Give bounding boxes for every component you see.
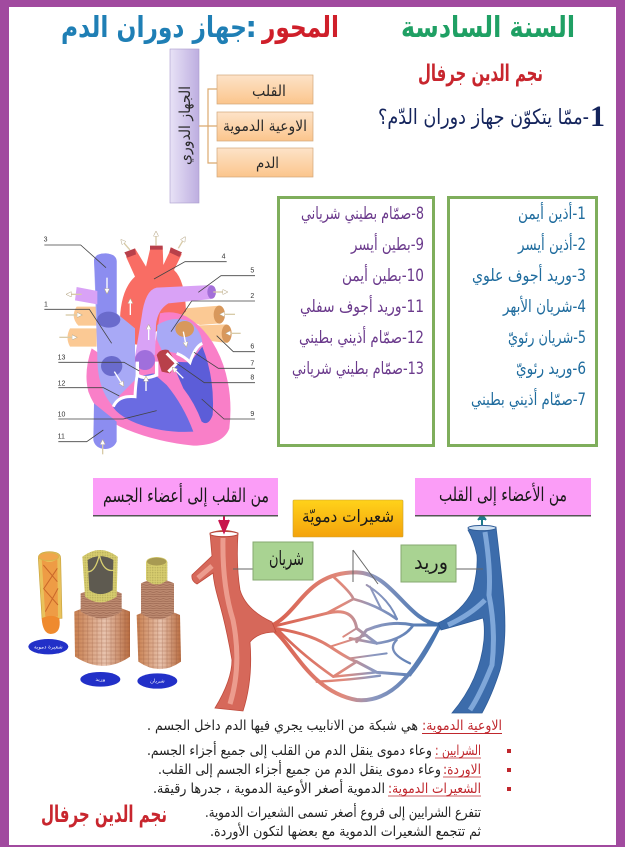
- oval label: capillary: شعيرة دموية: [34, 644, 63, 650]
- box: heart: القلب: [252, 82, 286, 100]
- left atrium: [157, 319, 202, 362]
- label box: artery: [253, 542, 313, 580]
- number labels: 8: [250, 374, 254, 381]
- number labels: 10: [58, 411, 66, 418]
- artery: [192, 530, 276, 711]
- text block: branching note: تتفرع الشرايين إلى فروع أصغر تسمى الشعيرات الدموية.: [205, 803, 481, 821]
- title: topic: :: [245, 10, 257, 44]
- left ventricle: [172, 347, 213, 423]
- label box: capillaries: شعيرات دمويّة: [302, 507, 394, 527]
- text block: vessel types list: الدموية أصغر الأوعية الدموية ، جدرها رقيقة.: [153, 779, 385, 797]
- oval label: capillary: [28, 639, 68, 654]
- box: blood vessels: [217, 112, 313, 141]
- panel: heart part names 1-7: 4-شريان الأبهر: [502, 296, 586, 317]
- artery cross section: [137, 557, 181, 669]
- panel: heart part names 1-7: 7-صمّام أذيني بطيني: [471, 388, 586, 410]
- inferior vena cava: [93, 403, 117, 449]
- arrow: blood out of vein: [478, 515, 486, 525]
- panel: heart part names 1-7: 5-شريان رئويّ: [508, 328, 586, 348]
- panel: heart part names 8-13: [278, 198, 434, 446]
- number labels: 11: [58, 434, 65, 441]
- title: grade level: السنة السادسة: [401, 10, 575, 44]
- bullet list markers: [507, 749, 511, 791]
- number labels: 2: [250, 293, 254, 300]
- text block: vessel types list: وعاء دموى ينقل الدم من جميع أجزاء الجسم إلى القلب.: [158, 760, 441, 778]
- label box: from organs to heart: من الأعضاء إلى القلب: [439, 483, 567, 507]
- oval label: artery: [137, 673, 177, 689]
- text block: vessel types list: الشرايين :: [435, 743, 481, 759]
- root box: الجهاز الدوري: [176, 86, 195, 165]
- text block: blood vessels definition: هي شبكة من الانابيب يجري فيها الدم داخل الجسم .: [147, 718, 418, 734]
- label box: from heart to body: من القلب إلى أعضاء الجسم: [103, 483, 269, 508]
- question 1: -ممّا يتكوّن جهاز دوران الدّم؟: [378, 105, 589, 129]
- number labels: 4: [222, 254, 226, 261]
- box: blood: الدم: [256, 154, 279, 172]
- number labels: 9: [250, 411, 254, 418]
- pulmonary artery: [75, 285, 216, 370]
- leader lines: [44, 245, 255, 442]
- text block: blood vessels definition: الاوعية الدموية:: [422, 718, 502, 734]
- author name top: نجم الدين جرفال: [418, 61, 543, 87]
- myocardium: [86, 312, 230, 446]
- panel: heart part names 1-7: [448, 198, 596, 446]
- label box: from organs to heart: [415, 478, 591, 516]
- panel: heart part names 8-13: 8-صمّام بطيني شرياني: [301, 204, 424, 224]
- label box: vein: وريد: [414, 550, 448, 574]
- label box: capillaries: [293, 500, 403, 537]
- number labels: 13: [58, 355, 66, 362]
- box: blood: [217, 148, 313, 177]
- aorta: [120, 247, 186, 345]
- oval label: vein: وريد: [95, 677, 106, 683]
- panel: heart part names 8-13: 10-بطين أيمن: [342, 264, 424, 286]
- panel: heart part names 1-7: 1-أذين أيمن: [518, 202, 586, 224]
- root box: [170, 49, 199, 203]
- text block: vessel types list: الاوردة:: [443, 762, 481, 778]
- capillary cross section: [38, 552, 62, 634]
- box: blood vessels: الاوعية الدموية: [223, 117, 307, 135]
- oval label: artery: شريان: [150, 679, 165, 685]
- vein: [438, 525, 505, 713]
- oval label: vein: [80, 672, 120, 687]
- question 1: [378, 100, 605, 133]
- illustration: artery capillaries vein network: [192, 515, 505, 713]
- label box: from heart to body: [93, 478, 278, 516]
- panel: heart part names 1-7: 6-وريد رئويّ: [516, 359, 586, 379]
- text block: branching note: ثم تتجمع الشعيرات الدموية مع بعضها لتكون الأوردة.: [210, 822, 481, 840]
- panel: heart part names 8-13: 13-صمّام بطيني شرياني: [292, 359, 424, 379]
- number labels: [44, 237, 254, 441]
- capillary network: [272, 572, 440, 700]
- number labels: 6: [250, 344, 254, 351]
- vein cross section: [74, 550, 130, 666]
- text block: vessel types list: وعاء دموى ينقل الدم من القلب إلى جميع أجزاء الجسم.: [147, 741, 432, 759]
- text block: vessel types list: الشعيرات الدموية:: [388, 781, 481, 797]
- number labels: 1: [44, 302, 48, 309]
- panel: heart part names 8-13: 9-بطين أيسر: [350, 233, 424, 255]
- number labels: 3: [44, 237, 48, 244]
- panel: heart part names 8-13: 12-صمّام أذيني بطيني: [299, 326, 424, 348]
- chart: labelled heart diagram: [44, 235, 255, 454]
- title: topic: المحور: [260, 10, 339, 44]
- question 1: 1: [590, 100, 605, 133]
- panel: heart part names 1-7: 3-وريد أجوف علوي: [472, 264, 586, 286]
- number labels: 7: [250, 360, 254, 367]
- superior vena cava and right atrium: [94, 253, 137, 407]
- arrow: blood into artery: [219, 516, 229, 532]
- author name bottom: نجم الدين جرفال: [41, 802, 167, 828]
- pulmonary veins: [67, 306, 232, 347]
- pointer lines: [233, 550, 483, 584]
- number labels: 5: [250, 268, 254, 275]
- title: topic: جهاز دوران الدم: [61, 10, 247, 44]
- label box: artery: شريان: [269, 546, 304, 570]
- illustration: vessel cross sections: [28, 550, 181, 689]
- valves: [113, 375, 137, 407]
- text block: vessel types list: [147, 741, 511, 797]
- number labels: 12: [58, 380, 66, 387]
- panel: heart part names 8-13: 11-وريد أجوف سفلي: [300, 295, 424, 317]
- label box: vein: [401, 545, 456, 582]
- diagram: circulatory system hierarchy: [170, 49, 313, 203]
- flow arrows: [59, 235, 241, 454]
- panel: heart part names 1-7: 2-أذين أيسر: [517, 233, 586, 255]
- box: heart: [217, 75, 313, 104]
- text block: branching note: [205, 803, 481, 840]
- right ventricle: [113, 373, 193, 432]
